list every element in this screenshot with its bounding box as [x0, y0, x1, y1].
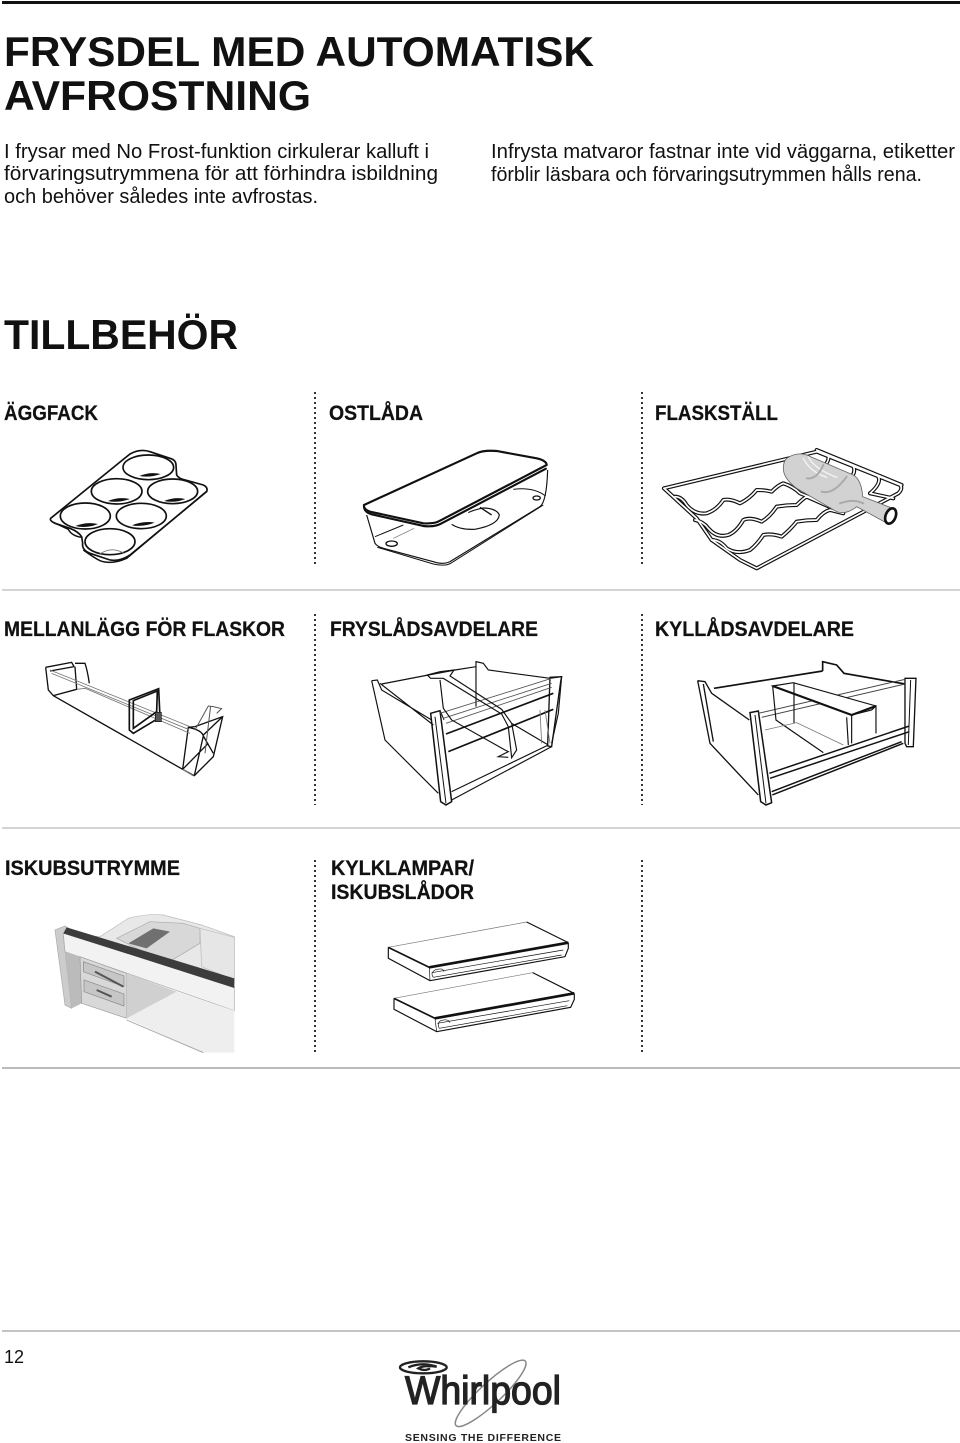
text block: right intro: förblir läsbara och förvaringsutrymmen hålls rena. [491, 164, 922, 186]
icon: freezer drawer divider [372, 662, 562, 805]
label: egg tray: ÄGGFACK [4, 402, 98, 425]
heading: accessories: TILLBEHÖR [4, 311, 238, 358]
icon: cold packs and ice trays [388, 922, 574, 1032]
text block: left intro: förvaringsutrymmena för att förhindra isbildning [4, 163, 438, 185]
title [4, 28, 594, 119]
label: cheese box: OSTLÅDA [329, 401, 423, 425]
label: cold packs and ice trays: KYLKLAMPAR/ [331, 857, 474, 880]
text block: right intro [491, 141, 955, 186]
image: ice cube compartment [55, 915, 234, 1053]
text block: right intro: Infrysta matvaror fastnar inte vid väggarna, etiketter [491, 141, 955, 163]
label: bottle spacer: MELLANLÄGG FÖR FLASKOR [4, 618, 285, 641]
icon: fridge drawer divider [698, 662, 916, 805]
label: freezer drawer divider: FRYSLÅDSAVDELARE [330, 617, 538, 641]
logo: Whirlpool: Whirlpool [405, 1369, 561, 1413]
label: bottle rack: FLASKSTÄLL [655, 402, 778, 425]
label: cold packs and ice trays [331, 857, 474, 904]
text block: left intro: och behöver således inte avfrostas. [4, 186, 318, 208]
title: AVFROSTNING [4, 72, 311, 119]
icon: egg tray [50, 450, 207, 562]
text block: left intro [4, 141, 438, 208]
title: FRYSDEL MED AUTOMATISK [4, 28, 594, 75]
label: cold packs and ice trays: ISKUBSLÅDOR [331, 880, 474, 904]
logo: Whirlpool [400, 1353, 561, 1443]
icon: cheese box [364, 451, 548, 565]
icon: bottle spacer [46, 662, 223, 776]
label: fridge drawer divider: KYLLÅDSAVDELARE [655, 617, 854, 641]
icon: bottle rack [664, 450, 902, 568]
page number: 12 [4, 1347, 24, 1367]
text block: left intro: I frysar med No Frost-funktion cirkulerar kalluft i [4, 141, 429, 163]
label: ice cube compartment: ISKUBSUTRYMME [5, 857, 180, 880]
